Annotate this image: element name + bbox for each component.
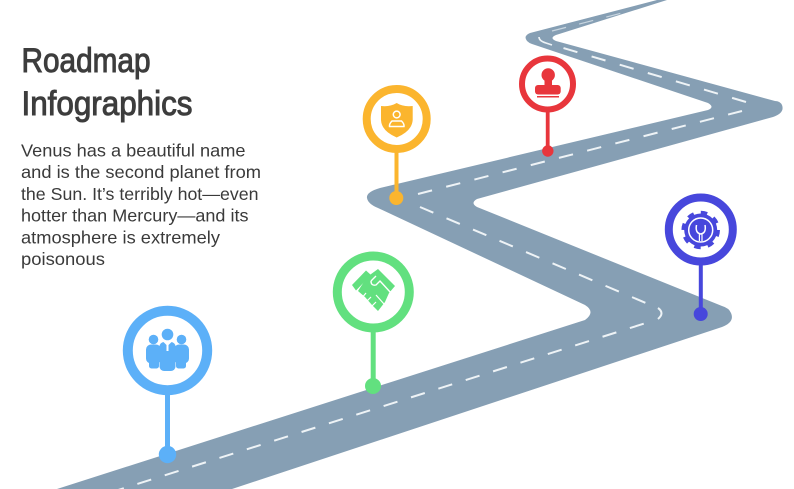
body text: atmosphere is extremely: [21, 228, 220, 248]
body text: Venus has a beautiful name: [21, 140, 246, 160]
title: [22, 42, 192, 123]
pin: blue team: [128, 311, 207, 463]
icon: shield with person: [381, 103, 413, 138]
icon: gear with wrench: [683, 212, 718, 248]
icon: group of people: [146, 329, 189, 371]
road centre dashes: [110, 13, 746, 489]
body text: the Sun. It’s terribly hot—even: [21, 184, 258, 204]
body text: poisonous: [21, 249, 105, 269]
pin: yellow security: [367, 89, 427, 205]
body text: and is the second planet from: [21, 162, 261, 182]
title: Roadmap: [22, 42, 150, 80]
title: Infographics: [22, 85, 192, 123]
pin: purple settings: [669, 198, 733, 321]
icon: stamp: [535, 68, 561, 98]
body text: hotter than Mercury—and its: [21, 206, 249, 226]
pin: red stamp: [522, 58, 573, 157]
icon: handshake: [352, 269, 395, 311]
body text: [21, 140, 261, 269]
pin: green partnership: [337, 256, 409, 394]
